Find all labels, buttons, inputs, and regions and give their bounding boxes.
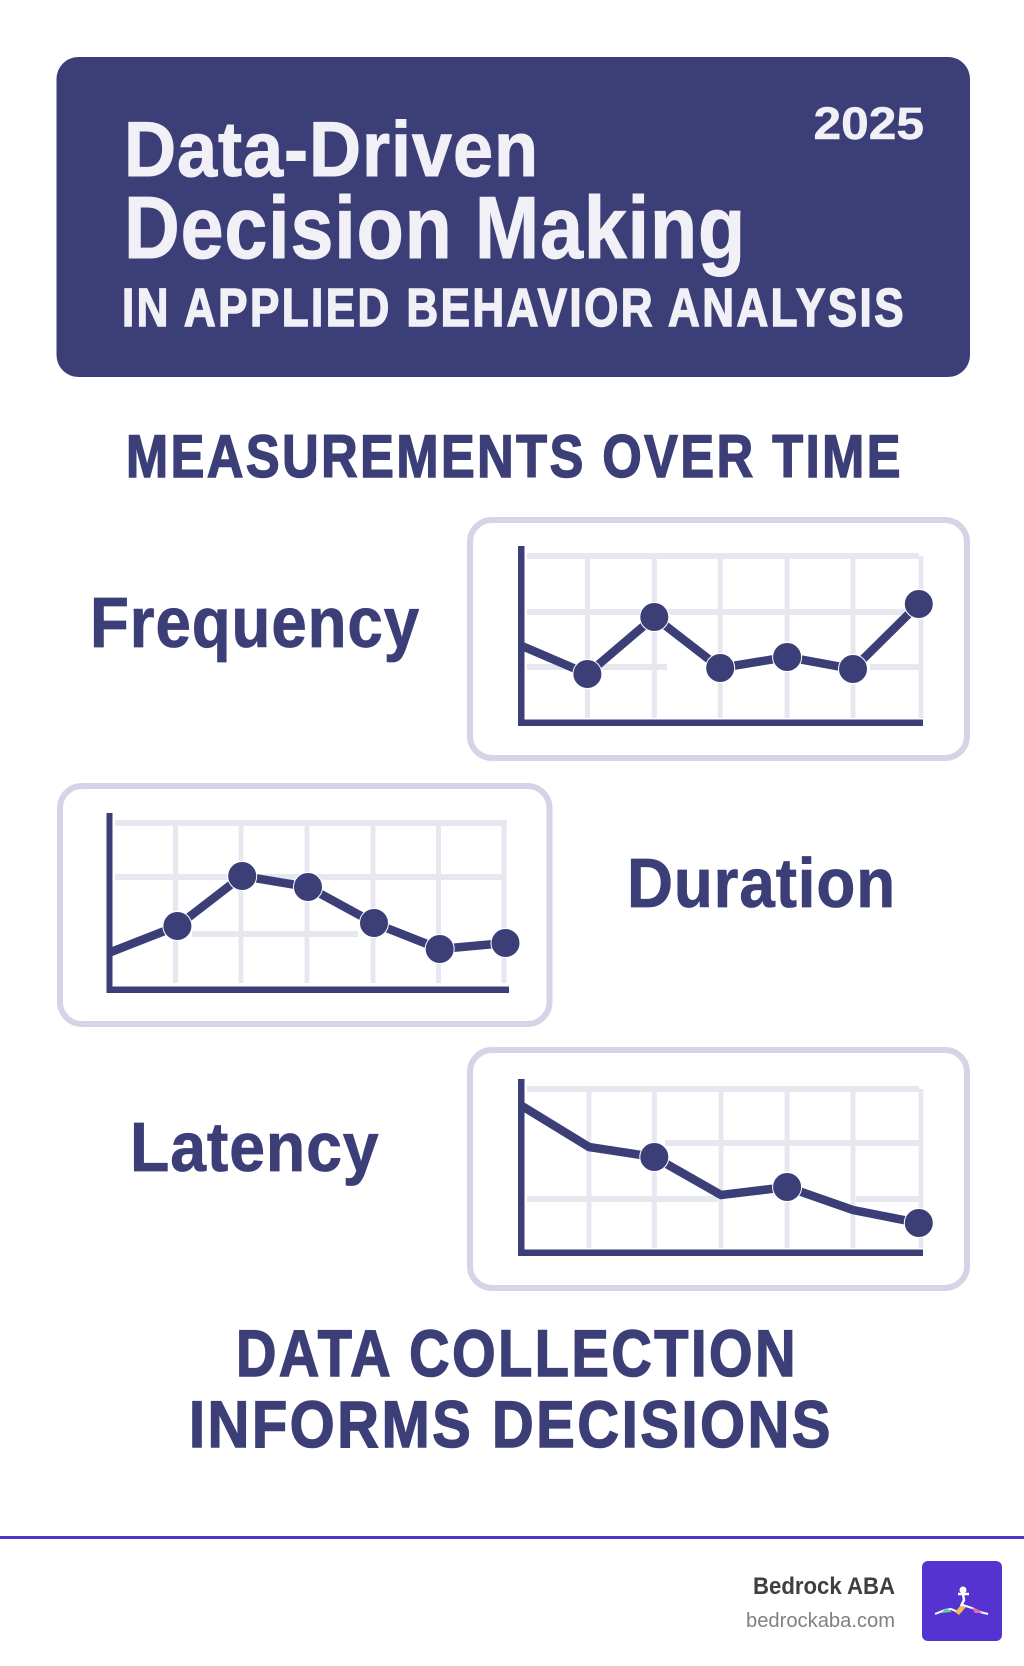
header banner [56,57,970,377]
label: frequency: Frequency [90,584,420,663]
panel: latency line chart [470,1050,967,1288]
footer brand name: Bedrock ABA [753,1573,895,1600]
title line 2: Decision Making [124,178,746,277]
data points [640,1142,933,1238]
closing statement: INFORMS DECISIONS [189,1387,833,1461]
label: latency: Latency [130,1108,380,1186]
axes [106,813,509,993]
heading: measurements over time: MEASUREMENTS OVER TIME [126,423,903,490]
axes [518,1079,923,1256]
data points [573,590,933,688]
panel: duration line chart [60,786,550,1024]
icon: bedrock logo [922,1561,1002,1641]
data points [163,862,520,964]
closing statement [189,1316,833,1461]
title line 1: Data-Driven [124,105,539,193]
axes [518,546,923,726]
footer divider [0,1536,1024,1539]
footer website: bedrockaba.com [746,1610,895,1632]
closing statement: DATA COLLECTION [236,1316,798,1390]
year: 2025 [814,98,924,149]
label: duration: Duration [627,844,896,922]
panel: frequency line chart [470,520,967,758]
